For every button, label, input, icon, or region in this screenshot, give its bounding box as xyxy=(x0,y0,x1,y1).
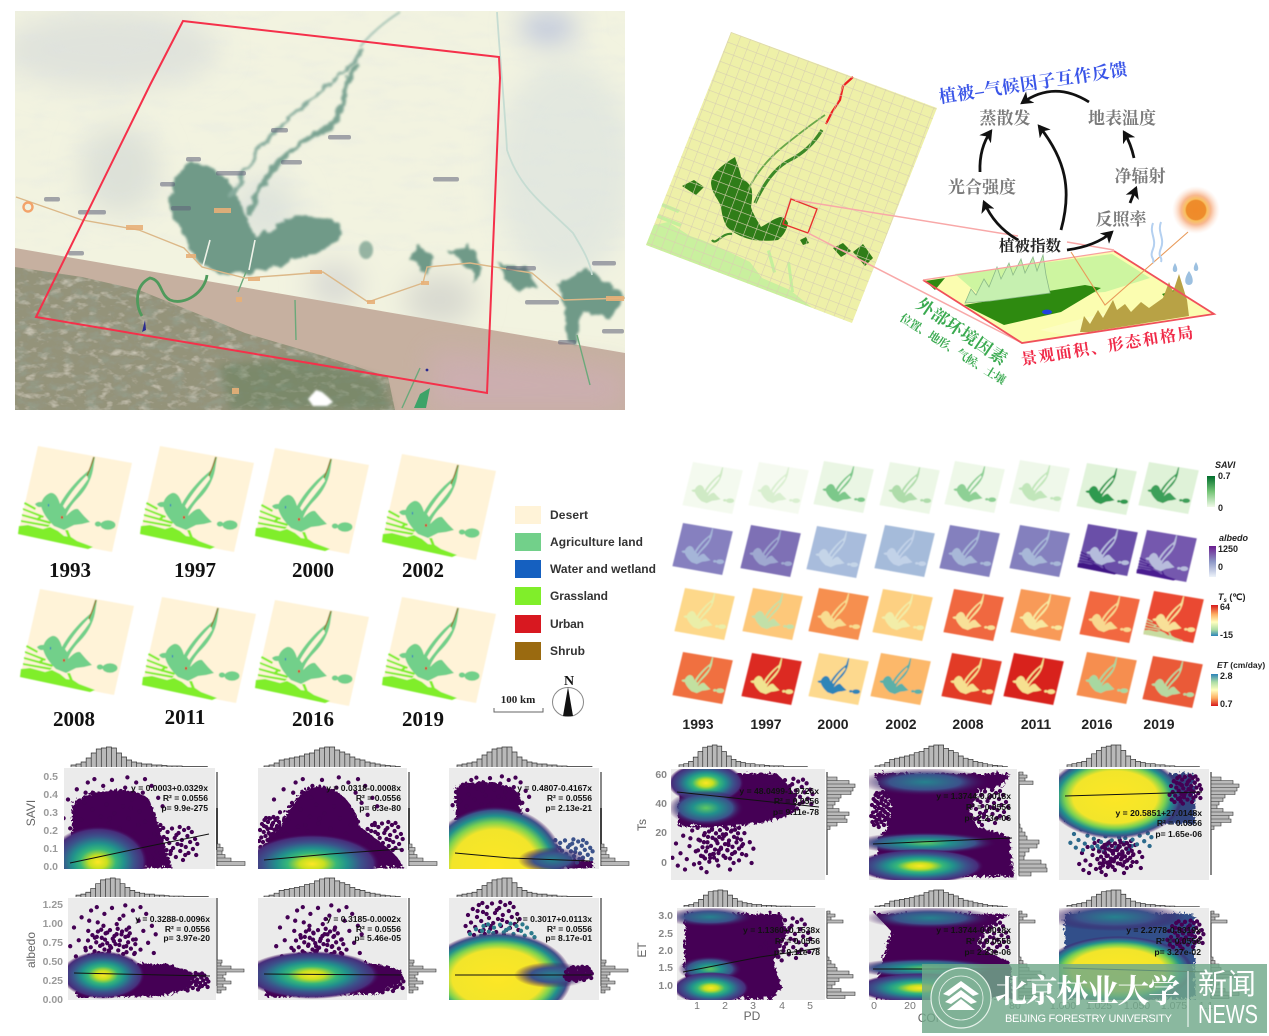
chart: ET vs PD: R² = 0.0556 xyxy=(775,936,820,946)
x axis: CONTAG: 80 xyxy=(1009,1000,1021,1012)
chart: SAVI vs third metric: R² = 0.0556 xyxy=(547,793,592,803)
chart: SAVI vs CONTAG: p= 6.3e-80 xyxy=(359,803,401,813)
chart: Ts vs third metric: p= 1.65e-06 xyxy=(1155,829,1202,839)
chart: ET vs CONTAG: y = 1.3744-0.0018x xyxy=(936,925,1011,935)
y axis: SAVI: 0.2 xyxy=(43,825,58,837)
y axis: ET xyxy=(635,910,673,992)
SAVI 2002 xyxy=(879,462,940,514)
environmental map year labels: 2019 xyxy=(1143,716,1175,732)
legend: land-use classes: Water and wetland xyxy=(550,562,656,576)
environmental map year labels: 2008 xyxy=(952,716,984,732)
legend: land-use classes xyxy=(515,506,656,660)
chart: Ts vs third metric xyxy=(1059,769,1209,880)
legend: ET: ET (cm/day) xyxy=(1217,660,1265,670)
legend: SAVI xyxy=(1207,460,1236,513)
y axis: albedo: 0.25 xyxy=(43,975,63,987)
legend: SAVI: SAVI xyxy=(1215,460,1236,470)
map labels xyxy=(44,128,624,344)
chart: SAVI vs PD: R² = 0.0556 xyxy=(163,793,208,803)
land-use year labels: 2000 xyxy=(292,558,334,582)
map 2011 xyxy=(142,597,256,703)
Ts 2008 xyxy=(943,589,1004,641)
chart: albedo vs CONTAG: p= 5.46e-05 xyxy=(354,933,401,943)
y axis: albedo: 1.00 xyxy=(43,918,63,930)
legend: albedo: 0 xyxy=(1218,562,1223,572)
panel: surface temperature maps xyxy=(674,588,1204,643)
legend: land-use classes: Agriculture land xyxy=(550,535,643,549)
chart: albedo vs PD: p= 3.97e-20 xyxy=(163,933,210,943)
y axis: SAVI: 0.3 xyxy=(43,807,58,819)
y axis: albedo xyxy=(24,899,63,1006)
zoom connector lines xyxy=(795,200,1114,343)
panel: landscape inset xyxy=(923,251,1214,343)
y axis: albedo: 0.00 xyxy=(43,994,63,1006)
albedo 1997 xyxy=(740,525,801,577)
y axis: ET: ET xyxy=(635,942,649,958)
x axis: third metric xyxy=(1050,1000,1213,1012)
node: surface temperature: 地表温度 xyxy=(1088,108,1156,128)
legend: ET xyxy=(1211,660,1265,709)
x axis: third metric: 1.075 xyxy=(1161,1000,1187,1012)
SAVI 1997 xyxy=(748,462,809,514)
node: vegetation index: 植被指数 xyxy=(999,236,1061,255)
y axis: SAVI: 0.1 xyxy=(43,843,58,855)
label: landscape area, shape and pattern: 景观面积、形态和格局 xyxy=(1020,323,1194,369)
x axis: PD: 3 xyxy=(750,1000,756,1012)
watermark: Beijing Forestry University News: BEIJING FORESTRY UNIVERSITY xyxy=(1005,1013,1173,1025)
y axis: ET: 3.0 xyxy=(658,910,673,922)
y axis: ET: 2.0 xyxy=(658,945,673,957)
chart: ET vs CONTAG xyxy=(869,908,1017,1000)
Ts 2019 xyxy=(1143,591,1204,643)
chart: ET vs third metric: y = 2.2778-0.8319x xyxy=(1126,925,1201,935)
ET 2002 xyxy=(870,653,931,705)
legend: SAVI: 0 xyxy=(1218,503,1223,513)
top marginal histograms xyxy=(71,745,1199,907)
chart: albedo vs CONTAG xyxy=(244,898,407,1000)
y axis: ET: 1.5 xyxy=(658,962,673,974)
x axis: PD: PD xyxy=(744,1009,761,1023)
legend: land-use classes: Shrub xyxy=(550,644,585,658)
legend: albedo: 1250 xyxy=(1218,544,1238,554)
legend: land-use classes: Urban xyxy=(550,617,584,631)
y axis: Ts: 40 xyxy=(655,798,667,810)
albedo 2000 xyxy=(806,526,867,578)
SAVI 2019 xyxy=(1138,462,1199,514)
chart: SAVI vs CONTAG: R² = 0.0556 xyxy=(356,793,401,803)
rivers in mountains xyxy=(137,275,207,316)
scale bar: 100 km xyxy=(501,694,535,706)
ET 1997 xyxy=(741,653,802,705)
scale bar xyxy=(494,694,543,712)
chart: SAVI vs third metric xyxy=(425,768,599,930)
legend: albedo xyxy=(1209,533,1249,577)
ET 2019 xyxy=(1142,656,1203,708)
icon: university seal xyxy=(931,968,991,1028)
chart: SAVI vs third metric: p= 2.13e-21 xyxy=(545,803,592,813)
SAVI 1993 xyxy=(682,462,743,514)
map 2019 xyxy=(382,597,496,703)
chart: Ts vs PD xyxy=(668,763,825,880)
oasis vegetation xyxy=(170,12,624,346)
legend: surface temperature: (℃) xyxy=(1227,592,1245,602)
y axis: Ts: Ts xyxy=(635,819,649,831)
watermark: Beijing Forestry University News: 新闻 xyxy=(1198,968,1256,1001)
Ts 2016 xyxy=(1079,591,1140,643)
panel: evapotranspiration maps xyxy=(672,652,1203,708)
x axis: CONTAG: 40 xyxy=(939,1000,951,1012)
map 2000 xyxy=(255,448,369,554)
x axis: PD: 2 xyxy=(722,1000,728,1012)
node: albedo: 反照率 xyxy=(1096,210,1147,229)
chart: ET vs PD: y = 1.1360+0.1538x xyxy=(743,925,820,935)
chart: Ts vs PD: y = 48.0499-1.9726x xyxy=(739,786,819,796)
x axis: third metric: 1.000 xyxy=(1050,1000,1076,1012)
Ts 2000 xyxy=(808,588,869,640)
ET 2008 xyxy=(941,653,1002,705)
panel: land-use maps by year xyxy=(18,446,496,706)
reflected light path xyxy=(1071,232,1188,305)
arrows: feedback loop xyxy=(980,91,1136,250)
inset grass xyxy=(1080,274,1189,332)
chart: albedo vs PD xyxy=(61,898,216,1000)
land-use year labels: 1993 xyxy=(49,558,91,582)
chart: albedo vs CONTAG: R² = 0.0556 xyxy=(356,924,401,934)
environmental map year labels: 2016 xyxy=(1081,716,1113,732)
chart: SAVI vs third metric: y = 0.4807-0.4167x xyxy=(517,783,592,793)
chart: albedo vs PD: R² = 0.0556 xyxy=(165,924,210,934)
chart: Ts vs PD: R² = 0.0556 xyxy=(774,796,819,806)
label: position, terrain, climate, soil: 位置、地形、气候、土壤 xyxy=(897,311,1009,387)
albedo 1993 xyxy=(672,523,733,575)
vegetation oasis on gridded map xyxy=(711,157,788,241)
x axis: third metric: 1.050 xyxy=(1124,1000,1150,1012)
y axis: SAVI: SAVI xyxy=(24,800,38,826)
chart: ET vs third metric: R² = 0.0556 xyxy=(1156,936,1201,946)
node: evapotranspiration: 蒸散发 xyxy=(980,108,1030,128)
watermark: Beijing Forestry University News: 北京林业大学 xyxy=(995,973,1180,1009)
ET 1993 xyxy=(672,652,733,704)
SAVI 2008 xyxy=(944,461,1005,513)
land-use year labels: 2011 xyxy=(165,705,205,729)
x axis: CONTAG: 60 xyxy=(974,1000,986,1012)
x axis: third metric: 1.025 xyxy=(1086,1000,1112,1012)
chart: ET vs CONTAG: p= 2.23e-06 xyxy=(964,947,1011,957)
legend: surface temperature: T xyxy=(1218,592,1224,602)
land-use year labels: 2002 xyxy=(402,558,444,582)
y axis: albedo: 0.75 xyxy=(43,937,63,949)
chart: SAVI vs PD xyxy=(48,768,215,898)
x axis: third metric: 1.1 xyxy=(1199,1000,1213,1012)
legend: ET: 0.7 xyxy=(1220,699,1233,709)
icon: north arrow: N xyxy=(564,674,574,689)
Ts 1997 xyxy=(742,588,803,640)
y axis: albedo: 0.50 xyxy=(43,956,63,968)
legend: land-use classes: Grassland xyxy=(550,589,608,603)
panel: SAVI maps xyxy=(682,460,1199,515)
x axis: CONTAG: 0 xyxy=(871,1000,877,1012)
mountain and tan foreland xyxy=(15,248,625,410)
SAVI 2011 xyxy=(1009,460,1070,512)
environmental map year labels: 2011 xyxy=(1021,716,1051,732)
Ts 1993 xyxy=(674,588,735,640)
panel: satellite image of study area xyxy=(0,10,635,410)
x axis: CONTAG: CONTAG xyxy=(918,1011,968,1025)
y axis: ET: 1.0 xyxy=(658,980,673,992)
albedo 2016 xyxy=(1077,524,1138,576)
chart: Ts vs CONTAG: p= 2.23e-06 xyxy=(964,813,1011,823)
chart: ET vs third metric xyxy=(1059,908,1209,1000)
legend: surface temperature: 64 xyxy=(1220,602,1230,612)
chart: albedo vs third metric: p= 8.17e-01 xyxy=(545,933,592,943)
y axis: albedo: albedo xyxy=(24,932,38,968)
ET 2000 xyxy=(808,653,869,705)
chart: SAVI vs CONTAG xyxy=(258,768,407,869)
albedo 2011 xyxy=(1009,525,1070,577)
x axis: PD xyxy=(694,1000,813,1023)
map 2016 xyxy=(255,600,369,706)
land-use year labels: 2019 xyxy=(402,707,444,731)
environmental map year labels: 2000 xyxy=(817,716,849,732)
chart: ET vs third metric: p= 3.27e-02 xyxy=(1154,947,1201,957)
icon: sun xyxy=(1172,186,1220,234)
y axis: SAVI: 0.5 xyxy=(43,771,58,783)
Ts 2011 xyxy=(1010,589,1071,641)
land-use year labels: 2016 xyxy=(292,707,334,731)
environmental map year labels: 1997 xyxy=(750,716,782,732)
y axis: Ts: 60 xyxy=(655,769,667,781)
node: photosynthesis: 光合强度 xyxy=(948,177,1016,197)
y axis: SAVI: 0.4 xyxy=(43,789,58,801)
legend: SAVI: 0.7 xyxy=(1218,471,1231,481)
chart: SAVI vs CONTAG: y = 0.0318-0.0008x xyxy=(326,783,401,793)
icon: north arrow xyxy=(552,674,584,716)
map 2008 xyxy=(20,589,134,695)
chart: ET vs PD xyxy=(677,908,825,1000)
legend: surface temperature: s xyxy=(1224,598,1228,604)
grassland on gridded map xyxy=(646,202,852,323)
icon: evaporation waves xyxy=(1152,222,1162,263)
y axis: SAVI xyxy=(24,771,58,873)
map 1993 xyxy=(18,446,132,552)
legend: land-use classes: Desert xyxy=(550,508,588,522)
map 1997 xyxy=(140,446,254,552)
chart: Ts vs PD: p= 9.11e-78 xyxy=(773,807,819,817)
x axis: PD: 5 xyxy=(807,1000,813,1012)
y axis: Ts xyxy=(635,769,667,869)
road network xyxy=(16,197,625,302)
map 2002 xyxy=(382,454,496,560)
chart: Ts vs third metric: R² = 0.0556 xyxy=(1157,818,1202,828)
panel: gridded vegetation map xyxy=(646,32,937,323)
y axis: Ts: 20 xyxy=(655,827,667,839)
ET 2011 xyxy=(1003,653,1064,705)
icon: water drops xyxy=(1173,262,1198,285)
inset trees xyxy=(965,255,1050,303)
chart: Ts vs CONTAG xyxy=(869,769,1017,880)
land-use year labels: 1997 xyxy=(174,558,216,582)
legend: surface temperature xyxy=(1211,592,1245,640)
chart: ET vs PD: p= 9.11e-78 xyxy=(774,947,820,957)
ET 2016 xyxy=(1076,652,1137,704)
Ts 2002 xyxy=(872,589,933,641)
environmental map year labels: 1993 xyxy=(682,716,714,732)
legend: ET: 2.8 xyxy=(1220,671,1233,681)
study area boundary xyxy=(36,21,500,393)
land-use year labels xyxy=(49,558,444,731)
y axis: ET: 2.5 xyxy=(658,928,673,940)
chart: albedo vs PD: y = 0.3288-0.0096x xyxy=(135,914,210,924)
y axis: SAVI: 0.0 xyxy=(43,861,58,873)
chart: SAVI vs PD: p= 9.9e-275 xyxy=(161,803,208,813)
chart: albedo vs third metric xyxy=(449,898,599,1000)
right marginal histograms xyxy=(217,772,1239,998)
chart: Ts vs CONTAG: R² = 0.0556 xyxy=(966,802,1011,812)
legend: surface temperature: -15 xyxy=(1220,630,1233,640)
chart: Ts vs third metric: y = 20.5851+27.0148x xyxy=(1116,808,1202,818)
albedo 2019 xyxy=(1136,530,1197,582)
SAVI 2000 xyxy=(813,461,874,513)
chart: ET vs CONTAG: R² = 0.0556 xyxy=(966,936,1011,946)
y axis: Ts: 0 xyxy=(661,857,667,869)
panel: albedo maps xyxy=(672,523,1197,582)
river in red on gridded map xyxy=(826,77,853,124)
x axis: PD: 4 xyxy=(779,1000,785,1012)
SAVI 2016 xyxy=(1076,463,1137,515)
chart: SAVI vs PD: y = 0.0003+0.0329x xyxy=(131,783,208,793)
watermark: Beijing Forestry University News xyxy=(922,964,1267,1033)
land-use year labels: 2008 xyxy=(53,707,95,731)
x axis: CONTAG xyxy=(871,1000,1021,1025)
legend: albedo: albedo xyxy=(1219,533,1249,543)
chart: albedo vs CONTAG: y = 0.3185-0.0002x xyxy=(326,914,401,924)
x axis: PD: 1 xyxy=(694,1000,700,1012)
x axis: CONTAG: 20 xyxy=(904,1000,916,1012)
title: vegetation-climate feedback: 植被–气候因子互作反馈 xyxy=(938,59,1129,107)
environmental map year labels xyxy=(682,716,1175,732)
albedo 2002 xyxy=(874,525,935,577)
chart: Ts vs CONTAG: y = 1.3744-0.0018x xyxy=(936,791,1011,801)
node: net radiation: 净辐射 xyxy=(1114,167,1166,186)
label: external environment factors: 外部环境因素 xyxy=(913,294,1011,369)
y axis: albedo: 1.25 xyxy=(43,899,63,911)
albedo 2008 xyxy=(939,525,1000,577)
chart: albedo vs third metric: y = 0.3017+0.0113x xyxy=(516,914,592,924)
chart: albedo vs third metric: R² = 0.0556 xyxy=(547,924,592,934)
environmental map year labels: 2002 xyxy=(885,716,917,732)
